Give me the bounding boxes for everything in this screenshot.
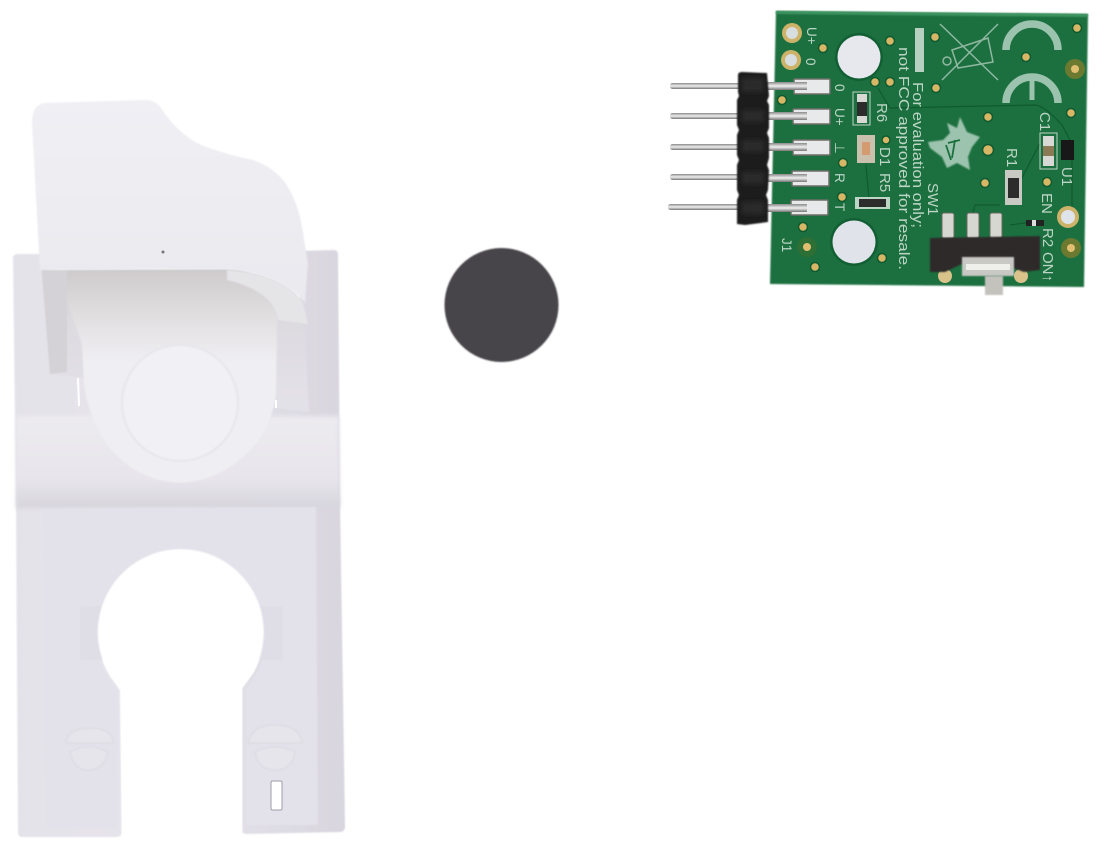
gold vias	[778, 24, 1082, 272]
board labels: R6	[873, 103, 890, 122]
R1	[1005, 170, 1022, 205]
large plated holes	[781, 23, 1085, 258]
keyhole side recesses	[80, 606, 283, 660]
right bump	[248, 725, 302, 770]
board labels: ⊥	[832, 142, 847, 154]
black header	[737, 72, 769, 225]
crossed-out bin symbol	[940, 24, 998, 80]
D1 LED	[857, 135, 875, 163]
keyhole cut-out	[98, 549, 264, 844]
evaluation notice: For evaluation only;	[909, 82, 925, 228]
R2	[1026, 220, 1044, 226]
flap speck	[162, 250, 164, 254]
evaluation notice: not FCC approved for resale.	[895, 47, 911, 270]
header pins	[668, 83, 740, 210]
dome circle	[122, 345, 238, 461]
board labels	[779, 27, 1075, 282]
board labels: J1	[779, 238, 794, 252]
slide switch	[930, 213, 1040, 295]
slot	[271, 781, 282, 810]
board labels: R	[832, 173, 847, 183]
board labels: SW1	[924, 183, 941, 216]
header highlights	[742, 78, 764, 214]
cross bar shading	[16, 416, 340, 508]
recessed plate	[42, 507, 318, 828]
R6	[853, 92, 870, 125]
left side strip	[42, 270, 67, 374]
hinge shadow	[42, 269, 309, 412]
board labels: 0	[832, 84, 847, 92]
clip base body	[13, 250, 345, 837]
pcb edge tint	[776, 11, 1088, 17]
pin leads	[765, 82, 807, 212]
board labels: T	[832, 203, 847, 211]
board labels: EN	[1038, 193, 1055, 214]
flap lip	[227, 270, 308, 324]
board labels: C1	[1036, 112, 1053, 131]
black magnet disc	[444, 248, 558, 362]
left bump	[66, 728, 114, 770]
C1	[1040, 133, 1057, 169]
board labels: U+	[804, 27, 819, 45]
white plastic clip	[13, 100, 345, 844]
switch body	[930, 236, 1040, 272]
board labels: D1	[876, 147, 893, 166]
R5	[855, 197, 890, 209]
slider knob	[962, 257, 1014, 276]
TI logo	[928, 117, 980, 170]
traces	[866, 88, 1072, 225]
evaluation notice	[895, 47, 925, 270]
board labels: R2	[1039, 228, 1056, 247]
solder pads	[791, 79, 830, 215]
hinge gap highlights	[78, 378, 276, 408]
CE mark	[1006, 24, 1058, 103]
U1	[1061, 140, 1074, 160]
slider handle	[985, 276, 1003, 295]
components	[853, 92, 1074, 226]
flap top	[32, 100, 308, 303]
board labels: ON↑	[1039, 252, 1056, 282]
switch feet	[938, 269, 952, 283]
board labels: R1	[1003, 148, 1020, 167]
silkscreen bar	[915, 28, 924, 72]
switch pins	[942, 213, 1002, 238]
circuit board	[668, 11, 1088, 295]
board labels: U+	[832, 108, 847, 126]
pcb substrate	[770, 11, 1088, 287]
board labels: R5	[876, 173, 893, 192]
mounting holes	[830, 33, 883, 266]
board labels: 0	[803, 58, 818, 66]
dome tab	[67, 270, 277, 482]
board labels: U1	[1058, 167, 1075, 186]
